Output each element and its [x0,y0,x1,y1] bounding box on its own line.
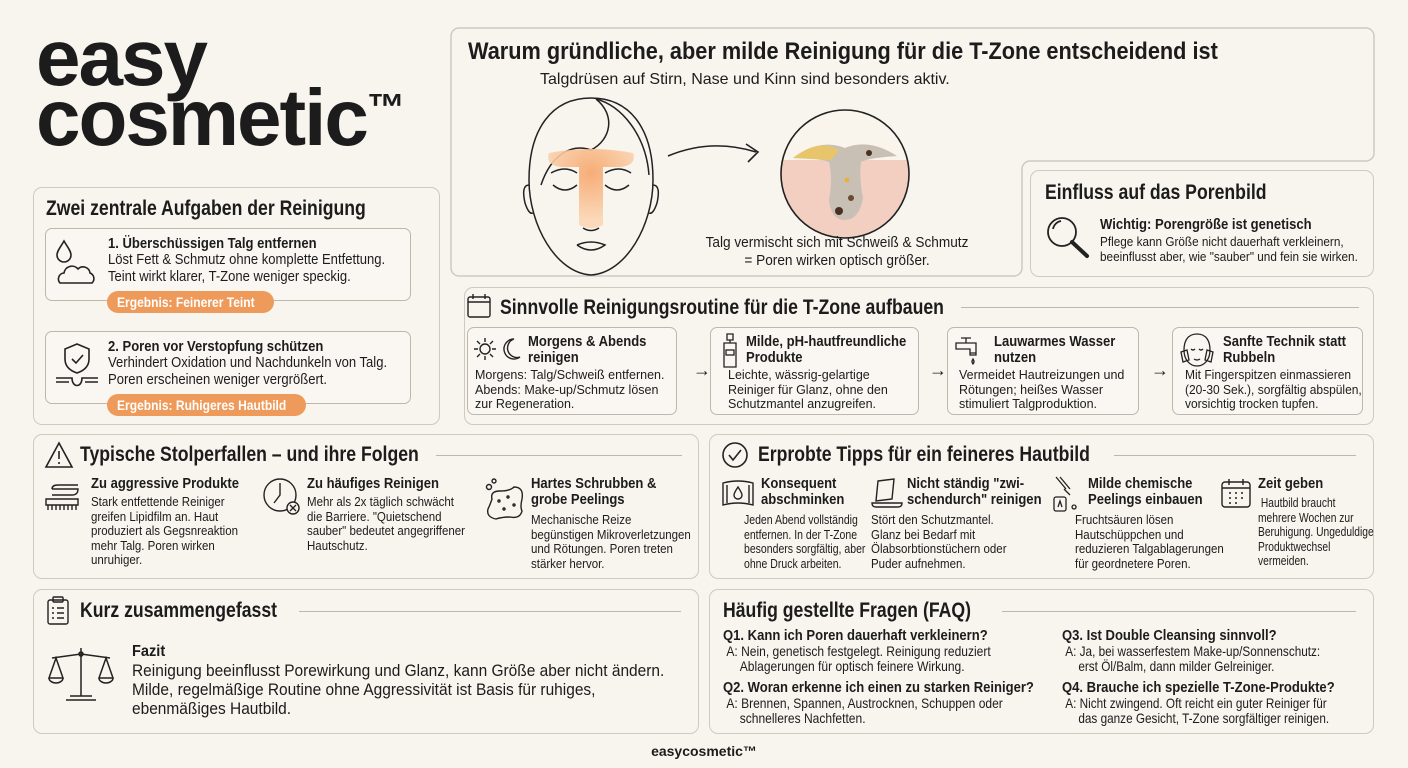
faq Q2 [723,680,1034,726]
panel: Reinigungsroutine [464,287,1374,425]
card: Lauwarmes Wasser: nutzen [994,350,1036,366]
card: Sanfte Technik: Mit Fingerspitzen einmassieren [1185,368,1351,382]
panel: Einfluss auf das Porenbild: Wichtig: Porengröße ist genetisch [1100,217,1312,233]
tip: nicht ständig: Nicht ständig "zwi- [907,476,1024,492]
card: Sanfte Technik [1172,327,1363,415]
icon: face with hands [1180,333,1214,367]
faq Q3: Q3. Ist Double Cleansing sinnvoll? [1062,628,1277,644]
card: Lauwarmes Wasser [947,327,1139,415]
icon: magnifier [1047,217,1090,258]
panel: Typische Stolperfallen [33,434,699,579]
panel: FAQ [709,589,1374,734]
panel: Zwei zentrale Aufgaben [33,187,440,425]
card: Morgens & Abends: Morgens & Abends [528,334,646,350]
pill: Ergebnis Ruhigeres Hautbild [107,394,306,416]
item: häufiges Reinigen: Zu häufiges Reinigen [307,476,439,492]
icon: bottle [723,333,737,368]
icon: faucet [955,337,977,365]
icon: brush [45,484,79,510]
faq Q3: erst Öl/Balm, dann milder Gelreiniger. [1078,658,1274,674]
faq Q2: A: Brennen, Spannen, Austrocknen, Schuppen oder [726,695,1003,711]
icon: sponge [486,478,523,520]
text: Fazit: Milde, regelmäßige Routine ohne Aggressivität ist Basis für ruhiges, [132,680,595,699]
faq Q2: Q2. Woran erkenne ich einen zu starken Reiniger? [723,680,1034,696]
heading: Typische Stolperfallen – und ihre Folgen [80,443,419,466]
item: Schrubben [486,476,691,570]
panel: Kurz zusammengefasst [33,589,699,734]
panel: Warum gründliche Reinigung [450,27,1375,277]
item: häufiges Reinigen: Hautschutz. [307,538,368,552]
card: Milde Produkte [710,327,919,415]
tip: Zeit geben: vermeiden. [1258,554,1309,568]
card: Talg entfernen: Löst Fett & Schmutz ohne komplette Entfettung. [108,252,385,268]
icon: dropper bottle [1053,476,1077,512]
illustration: face with T-zone [522,97,660,276]
faq Q3 [1062,628,1320,674]
tip: nicht ständig: Glanz bei Bedarf mit [871,528,975,542]
tip: nicht ständig: Stört den Schutzmantel. [871,513,994,527]
item: häufiges Reinigen: Mehr als 2x täglich schwächt [307,495,454,509]
card: Morgens & Abends: zur Regeneration. [475,397,574,411]
icon: sun and moon [474,338,520,360]
faq Q1: A: Nein, genetisch festgelegt. Reinigung reduziert [726,643,991,659]
heading: Einfluss auf das Porenbild [1045,181,1267,204]
tip: Zeit geben [1221,476,1374,568]
card: Lauwarmes Wasser: Vermeidet Hautreizungen und [959,368,1124,382]
heading: Zwei zentrale Aufgaben der Reinigung [46,197,366,220]
card: Milde Produkte: Schutzmantel anzugreifen. [728,397,876,411]
item: aggressive Produkte: greifen Lipidfilm an. Haut [91,510,218,524]
icon: check circle [722,442,748,468]
tip: chemische Peelings: reduzieren Talgablagerungen [1075,542,1224,556]
illustration: pore circle [780,109,910,239]
heading: Häufig gestellte Fragen (FAQ) [723,599,971,622]
pill: Ergebnis Feinerer Teint [107,291,274,313]
faq Q4: A: Nicht zwingend. Oft reicht ein guter Reiniger für [1065,695,1327,711]
subtitle: Talgdrüsen auf Stirn, Nase und Kinn sind besonders aktiv. [540,71,950,88]
icon: clock [263,478,300,515]
icon: blotting paper [871,478,903,508]
tip: abschminken: ohne Druck arbeiten. [744,556,841,570]
panel: Einfluss auf das Porenbild: beeinflusst aber, wie "sauber" und fein sie wirken. [1100,250,1358,264]
item: Schrubben: begünstigen Mikroverletzungen [531,528,691,542]
logo [36,13,403,162]
tip: abschminken [722,476,866,570]
card: Talg entfernen [45,228,411,301]
tip: chemische Peelings: Fruchtsäuren lösen [1075,513,1173,527]
tip: nicht ständig: schendurch" reinigen [907,492,1042,508]
faq Q4 [1062,680,1335,726]
icon: clipboard [47,596,69,625]
card: Morgens & Abends: Morgens: Talg/Schweiß entfernen. [475,368,664,382]
panel: Einfluss auf das Porenbild: Pflege kann Größe nicht dauerhaft verkleinern, [1100,235,1344,249]
pill: Ergebnis Ruhigeres Hautbild: Ergebnis: Ruhigeres Hautbild [117,397,286,413]
card: Poren schützen: Poren erscheinen weniger vergrößert. [108,372,327,388]
card: Morgens & Abends: reinigen [528,350,579,366]
item: Schrubben: Mechanische Reize [531,513,631,527]
card: Milde Produkte: Milde, pH-hautfreundliche [746,334,906,350]
logo: easy [36,13,206,102]
tip: abschminken: Jeden Abend vollständig [744,513,858,527]
item: aggressive Produkte: Zu aggressive Produkte [91,476,239,492]
icon: calendar [467,294,491,318]
tip: Zeit geben: mehrere Wochen zur [1258,510,1354,524]
tip: Zeit geben: Produktwechsel [1258,540,1330,554]
text: Fazit: ebenmäßiges Hautbild. [132,699,291,718]
item: Schrubben: Hartes Schrubben & [531,476,656,492]
faq Q1 [723,628,991,674]
arrow: → [929,360,947,380]
card: Sanfte Technik: (20-30 Sek.), sorgfältig abspülen, [1185,382,1362,396]
tip: Zeit geben: Hautbild braucht [1261,496,1336,510]
card: Morgens & Abends: Abends: Make-up/Schmutz lösen [475,382,658,396]
tip: chemische Peelings: Hautschüppchen und [1075,528,1184,542]
card: Morgens & Abends [467,327,677,415]
icon: warning [44,442,74,468]
item: häufiges Reinigen: sauber" bedeutet angegriffener [307,524,465,538]
panel: Einfluss auf das Porenbild [1030,170,1374,277]
card: Lauwarmes Wasser: Rötungen; heißes Wasser [959,382,1103,396]
card: Sanfte Technik: Sanfte Technik statt [1223,334,1346,350]
tip: chemische Peelings [1053,476,1224,570]
heading: Warum gründliche, aber milde Reinigung für die T-Zone entscheidend ist [468,38,1218,65]
arrow [668,143,760,163]
card: Talg entfernen: 1. Überschüssigen Talg entfernen [108,236,317,252]
tip: abschminken: entfernen. In der T-Zone [744,528,857,542]
item: Schrubben: grobe Peelings [531,492,625,508]
item: häufiges Reinigen: die Barriere. "Quietschend [307,510,441,524]
tip: abschminken: abschminken [761,492,844,508]
item: aggressive Produkte [45,476,239,567]
pill: Ergebnis Feinerer Teint: Ergebnis: Feinerer Teint [117,294,255,310]
text: Fazit: Reinigung beeinflusst Porewirkung und Glanz, kann Größe aber nicht ändern. [132,661,664,680]
text: Fazit [132,643,664,718]
card: Sanfte Technik: vorsichtig trocken tupfen. [1185,397,1318,411]
icon: scales [48,648,114,701]
tip: chemische Peelings: Peelings einbauen [1088,492,1203,508]
tip: chemische Peelings: Milde chemische [1088,476,1192,492]
card: Milde Produkte: Produkte [746,350,803,366]
tip: nicht ständig: Puder aufnehmen. [871,556,966,570]
faq Q4: Q4. Brauche ich spezielle T-Zone-Produkte? [1062,680,1335,696]
card: Talg entfernen: Teint wirkt klarer, T-Zone weniger speckig. [108,269,351,285]
tip: abschminken: besonders sorgfältig, aber [744,542,865,556]
faq Q3: A: Ja, bei wasserfestem Make-up/Sonnenschutz: [1065,643,1320,659]
faq Q2: schnelleres Nachfetten. [740,710,866,726]
card: Milde Produkte: Leichte, wässrig-gelartige [728,368,870,382]
footer: easycosmetic™ [651,743,757,759]
caption [706,235,968,269]
heading: Erprobte Tipps für ein feineres Hautbild [758,443,1090,466]
icon: pad with drop [722,480,754,506]
card: Poren schützen: Verhindert Oxidation und Nachdunkeln von Talg. [108,355,387,371]
tip: abschminken: Konsequent [761,476,836,492]
arrow: → [693,360,711,380]
caption: Talg vermischt sich mit Schweiß & Schmutz [706,235,968,251]
card: Lauwarmes Wasser: stimuliert Talgproduktion. [959,397,1097,411]
logo: cosmetic™ [36,73,403,162]
caption: = Poren wirken optisch größer. [744,253,930,269]
heading: Kurz zusammengefasst [80,599,277,622]
item: Schrubben: stärker hervor. [531,556,604,570]
item: aggressive Produkte: unruhiger. [91,553,142,567]
tip: chemische Peelings: für geordnetere Poren. [1075,556,1191,570]
card: Lauwarmes Wasser: Lauwarmes Wasser [994,334,1115,350]
item: Schrubben: und Rötungen. Poren treten [531,542,673,556]
panel: Erprobte Tipps [709,434,1374,579]
icon: shield and pore [56,343,98,386]
icon: drop and foam [56,240,95,284]
faq Q1: Ablagerungen für optisch feinere Wirkung. [740,658,965,674]
tip: nicht ständig: Ölabsorbtionstüchern oder [871,542,1007,556]
faq Q1: Q1. Kann ich Poren dauerhaft verkleinern? [723,628,988,644]
faq Q4: das ganze Gesicht, T-Zone sorgfältiger reinigen. [1078,710,1329,726]
card: Milde Produkte: Reiniger für Glanz, ohne den [728,382,888,396]
item: häufiges Reinigen [263,476,465,552]
icon: calendar grid [1221,479,1251,508]
item: aggressive Produkte: Stark entfettende Reiniger [91,495,225,509]
arrow: → [1151,360,1169,380]
tip: Zeit geben: Zeit geben [1258,476,1323,492]
text: Fazit: Fazit [132,643,165,660]
tip: Zeit geben: Beruhigung. Ungeduldige [1258,525,1374,539]
item: aggressive Produkte: produziert als Gegsnreaktion [91,524,238,538]
card: Sanfte Technik: Rubbeln [1223,350,1275,366]
card: Poren schützen: 2. Poren vor Verstopfung schützen [108,339,323,355]
heading: Sinnvolle Reinigungsroutine für die T-Zone aufbauen [500,296,944,319]
item: aggressive Produkte: mehr Talg. Poren wirken [91,538,215,552]
tip: nicht ständig [871,476,1042,570]
card: Poren schützen [45,331,411,404]
